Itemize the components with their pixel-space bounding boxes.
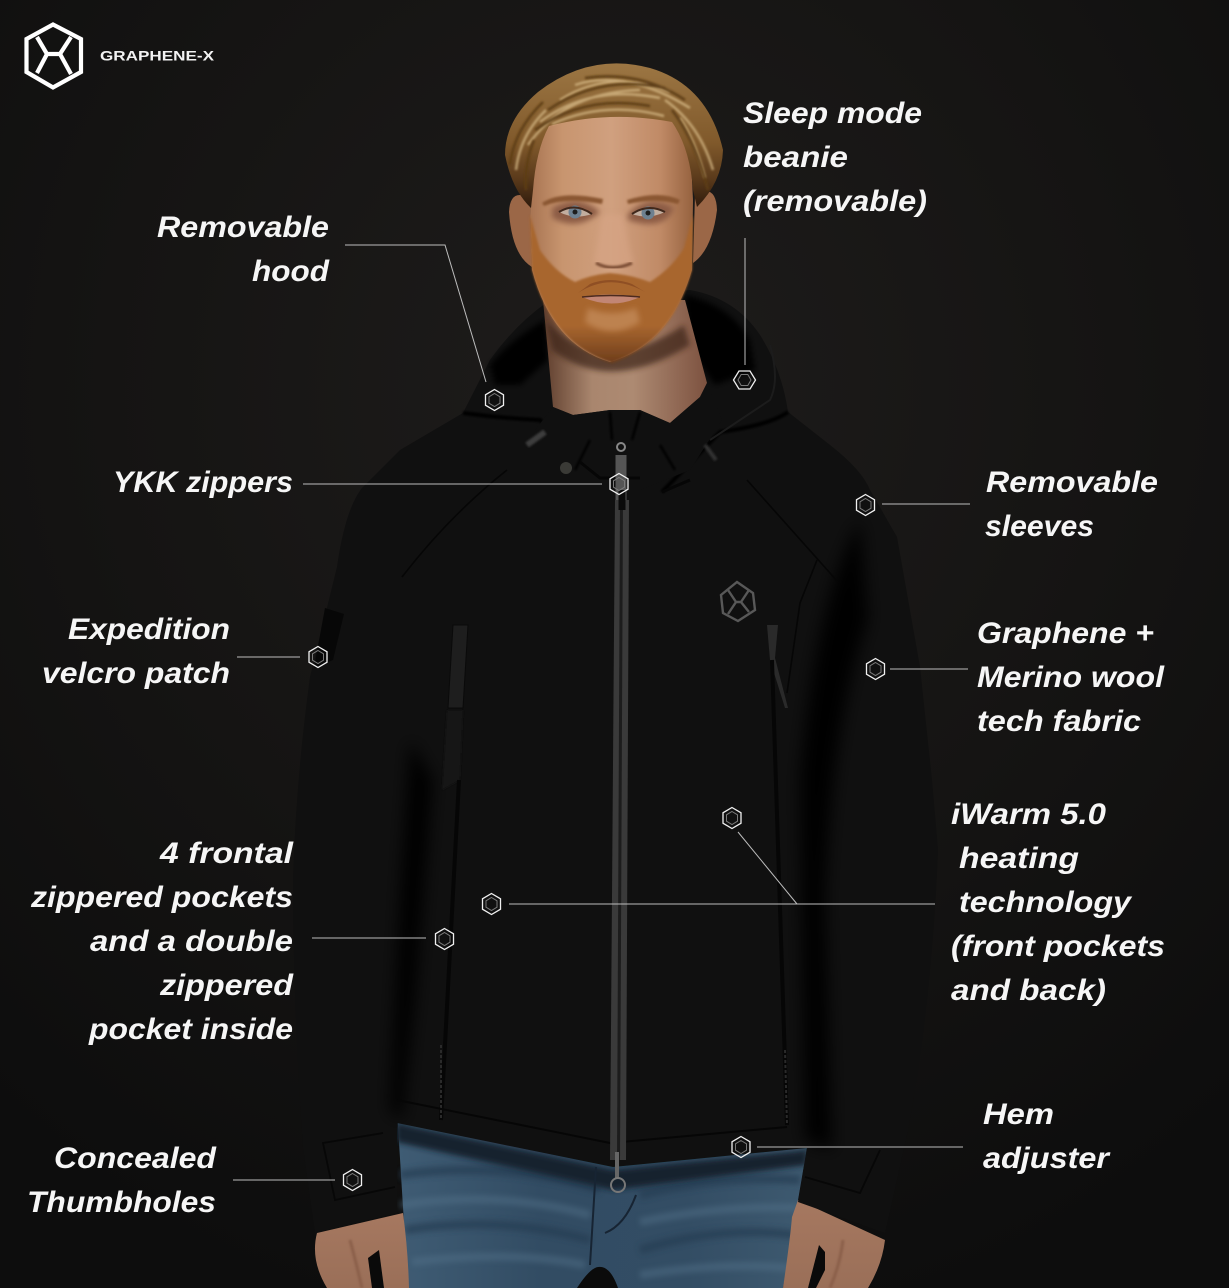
label: technology — [959, 886, 1132, 919]
head — [505, 63, 723, 363]
hood flaps — [463, 412, 788, 492]
inner collar — [535, 383, 722, 492]
label: beanie — [743, 141, 848, 174]
hood shadows — [490, 320, 548, 385]
leader line — [744, 238, 746, 365]
label: (removable) — [743, 185, 927, 218]
marker — [732, 1136, 750, 1158]
leader line — [345, 245, 486, 382]
drawcords and snap — [527, 432, 716, 474]
callout: graphene merino fabric — [866, 617, 1165, 738]
label: and back) — [951, 974, 1106, 1007]
callout: iWarm heating technology — [482, 798, 1165, 1007]
label: (front pockets — [951, 930, 1165, 963]
leader line — [233, 1179, 335, 1181]
label: YKK zippers — [113, 466, 293, 499]
face — [530, 116, 693, 362]
callout: concealed thumbholes — [27, 1142, 362, 1219]
velcro patch — [314, 608, 344, 668]
label: iWarm 5.0 — [951, 798, 1106, 831]
lower pocket zips — [441, 660, 787, 1125]
mouth — [582, 294, 640, 304]
label: Removable — [157, 211, 329, 244]
person wearing jacket — [293, 63, 938, 1288]
marker — [734, 371, 756, 389]
chest logo — [721, 582, 755, 621]
label: Hem — [983, 1098, 1054, 1131]
right chest pocket zip — [767, 625, 788, 708]
left chest pocket zip — [448, 625, 468, 708]
label: Merino wool — [977, 661, 1165, 694]
marker — [309, 646, 327, 668]
marker — [610, 474, 628, 494]
sleeve shadows — [390, 740, 433, 1120]
leader line — [303, 483, 602, 485]
callout: expedition velcro patch — [42, 613, 327, 690]
icon: logo hexagon — [26, 24, 81, 88]
raglan seams — [402, 470, 838, 693]
label: heating — [959, 842, 1079, 875]
chin shadow — [546, 320, 690, 371]
leader line — [890, 668, 968, 670]
jeans — [396, 1110, 810, 1288]
label: sleeves — [985, 510, 1094, 543]
center zipper — [610, 500, 629, 1160]
label: tech fabric — [977, 705, 1141, 738]
marker: upper — [723, 808, 741, 828]
zipper top — [616, 455, 626, 500]
hair — [505, 63, 723, 208]
label: Concealed — [54, 1142, 217, 1175]
cuff seams — [323, 1133, 880, 1200]
label: Graphene + — [977, 617, 1154, 650]
label: pocket inside — [88, 1013, 293, 1046]
eye sockets — [552, 201, 674, 224]
leader line — [882, 503, 970, 505]
logo — [26, 24, 215, 88]
marker — [856, 494, 874, 516]
callout: YKK zippers — [113, 466, 628, 499]
label: velcro patch — [42, 657, 230, 690]
label: and a double — [90, 925, 293, 958]
left pocket flap — [442, 710, 463, 790]
marker — [436, 928, 454, 950]
label: zippered — [159, 969, 294, 1002]
label: Thumbholes — [27, 1186, 216, 1219]
label: adjuster — [983, 1142, 1111, 1175]
label: 4 frontal — [159, 837, 294, 870]
marker — [344, 1170, 362, 1190]
marker — [486, 390, 504, 410]
callout: removable sleeves — [856, 466, 1158, 543]
neck — [543, 300, 707, 423]
hands — [315, 1200, 885, 1288]
callout: removable hood — [157, 211, 504, 410]
leader line — [757, 1146, 963, 1148]
leader lines — [509, 832, 935, 904]
label: Expedition — [68, 613, 230, 646]
marker — [866, 658, 884, 680]
label: zippered pockets — [30, 881, 293, 914]
brand name: GRAPHENE-X — [100, 48, 215, 64]
jacket body and sleeves — [293, 290, 938, 1233]
zipper pull ring — [611, 1152, 625, 1192]
callout: sleep mode beanie — [734, 97, 927, 389]
ears — [509, 191, 717, 267]
label: hood — [252, 255, 330, 288]
label: Removable — [986, 466, 1158, 499]
callout: frontal zippered pockets — [30, 837, 453, 1046]
callout: hem adjuster — [732, 1098, 1111, 1175]
label: Sleep mode — [743, 97, 922, 130]
eyebrows — [542, 195, 680, 206]
leader line — [237, 656, 300, 658]
marker: lower — [482, 894, 500, 914]
beard — [530, 215, 693, 363]
leader line — [312, 937, 426, 939]
hem band — [397, 1100, 787, 1143]
eyes — [559, 206, 665, 220]
nose — [594, 215, 634, 268]
